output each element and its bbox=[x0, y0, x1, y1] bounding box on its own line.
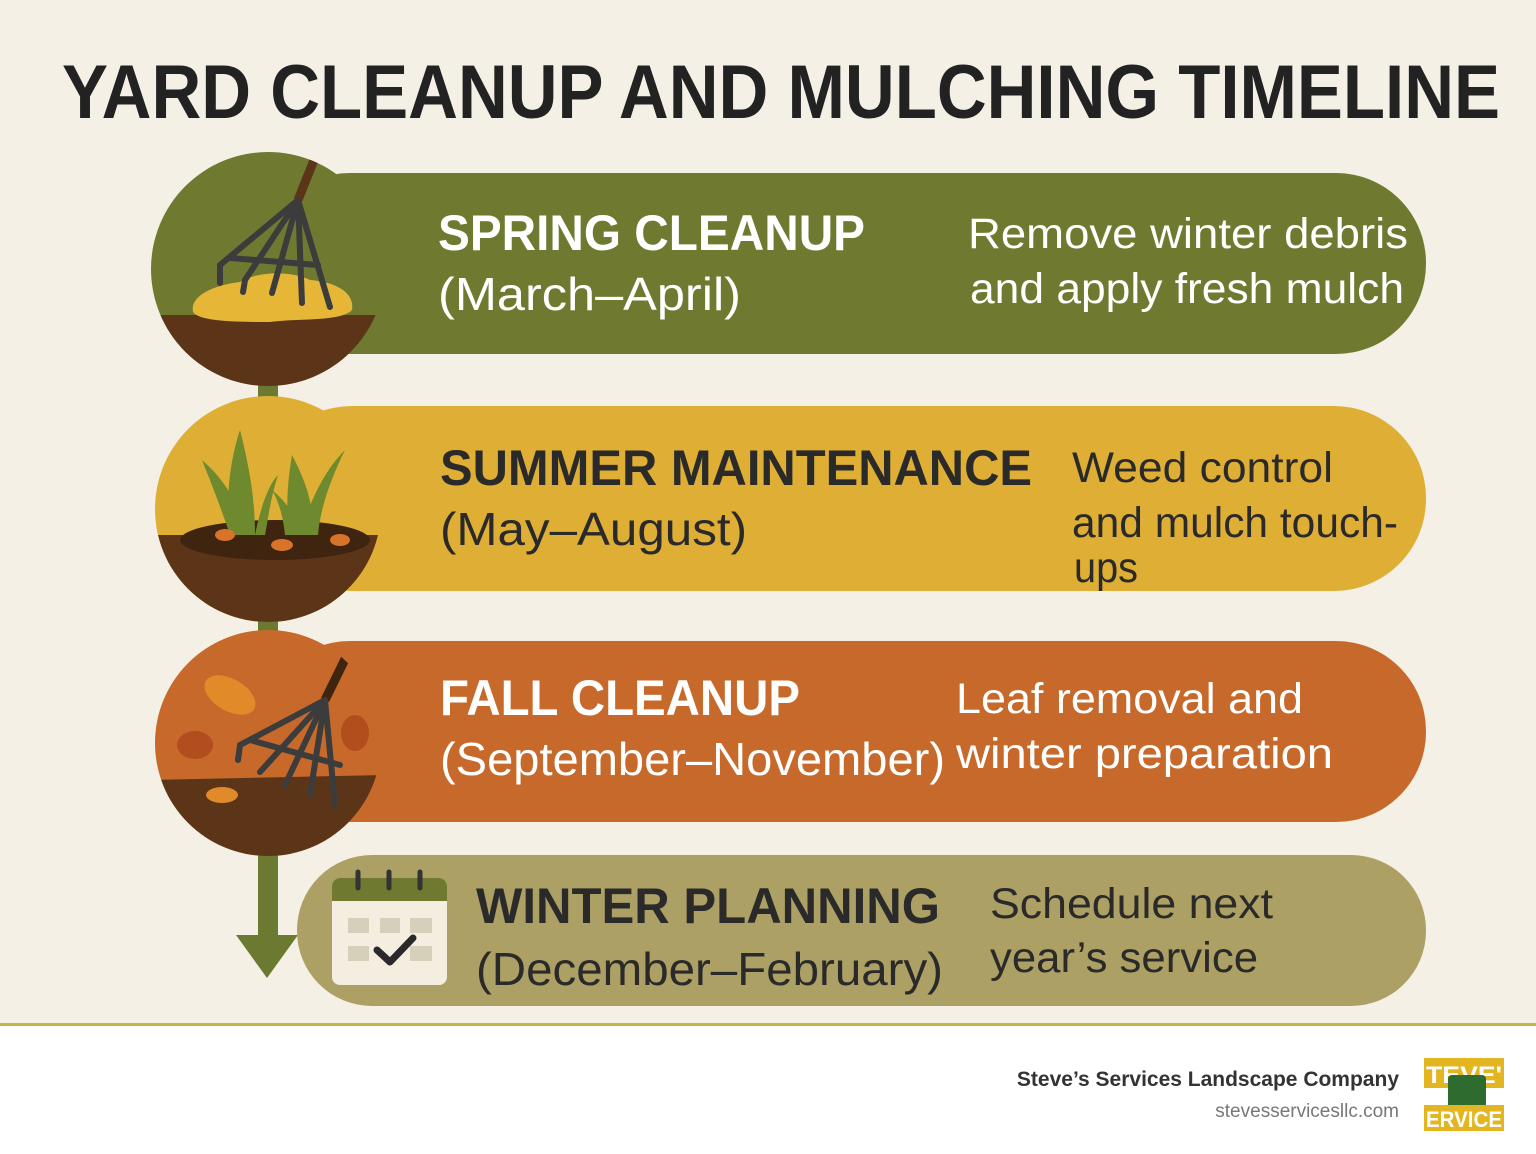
panel: summer maintenance bbox=[150, 396, 1426, 630]
text: summer description: and mulch touch- bbox=[1072, 499, 1398, 547]
panel: winter planning: (December–February) bbox=[476, 943, 943, 995]
text: summer description: ups bbox=[1074, 544, 1138, 592]
heading: fall: FALL CLEANUP bbox=[440, 670, 800, 726]
text: website: stevesservicesllc.com bbox=[1215, 1101, 1399, 1122]
panel: spring cleanup: (March–April) bbox=[438, 268, 741, 320]
text: spring description: and apply fresh mulch bbox=[970, 265, 1404, 313]
icon: company logo bbox=[1424, 1058, 1504, 1132]
text: winter description: Schedule next bbox=[990, 880, 1273, 928]
panel: spring cleanup bbox=[140, 152, 1426, 400]
icon: plants in soil bbox=[150, 396, 385, 630]
text: summer description bbox=[1072, 444, 1398, 592]
footer bbox=[0, 1023, 1536, 1154]
heading: spring: SPRING CLEANUP bbox=[438, 205, 865, 261]
panel: summer maintenance: (May–August) bbox=[440, 503, 747, 555]
text: summer description: Weed control bbox=[1072, 444, 1333, 492]
icon: rake with leaves bbox=[150, 630, 385, 860]
heading: summer: SUMMER MAINTENANCE bbox=[440, 440, 1032, 496]
panel: winter planning bbox=[297, 855, 1426, 1006]
text: spring description: Remove winter debris bbox=[968, 210, 1408, 258]
timeline connector arrow bbox=[236, 370, 298, 978]
panel: fall cleanup: (September–November) bbox=[440, 733, 945, 785]
icon: company logo: ERVICE bbox=[1426, 1107, 1502, 1132]
icon: company logo: TEVE' bbox=[1426, 1062, 1502, 1089]
icon: rake in mulch bbox=[151, 152, 376, 386]
text: winter description bbox=[990, 880, 1273, 982]
text: fall description: winter preparation bbox=[955, 730, 1333, 778]
panel: fall cleanup bbox=[150, 630, 1426, 860]
text: company name: Steve’s Services Landscape Company bbox=[1017, 1068, 1399, 1091]
icon: calendar bbox=[332, 872, 447, 985]
text: fall description bbox=[955, 675, 1333, 778]
text: spring description bbox=[968, 210, 1408, 313]
heading: winter: WINTER PLANNING bbox=[476, 878, 940, 934]
text: winter description: year’s service bbox=[990, 934, 1258, 982]
text: fall description: Leaf removal and bbox=[956, 675, 1303, 723]
